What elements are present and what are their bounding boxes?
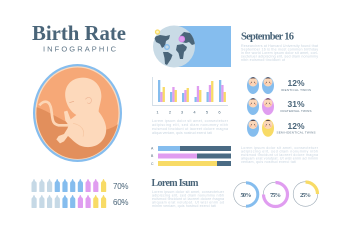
text block: bars caption — [241, 146, 319, 164]
axis labels: 5 — [206, 110, 209, 114]
pin: yellow — [156, 30, 160, 34]
heading: September 16: September 16 — [241, 32, 294, 42]
text block: september: in the world Lorem ipsum dolor sit amet, con- — [241, 51, 319, 55]
twins: semi-identical: SEMI-IDENTICAL TWINS — [276, 130, 316, 134]
bars — [158, 80, 226, 102]
map panel with globe — [153, 26, 231, 68]
twins: semi-identical — [247, 119, 316, 137]
text block: lorem: adipiscing elit, sed diam nonummy nibh — [152, 194, 224, 198]
stacked bars: C — [151, 162, 154, 166]
stacked bars: A — [151, 146, 154, 150]
subtitle: INFOGRAPHIC — [43, 44, 117, 54]
donut: 75%: 75% — [270, 192, 281, 199]
text block: lorem: minim veniam, quis nostrud exerci tati — [152, 204, 216, 208]
axis labels: 1 — [156, 110, 159, 114]
donut: 50% — [234, 182, 258, 207]
axis labels: 6 — [218, 110, 221, 114]
pictogram: bottles 60% — [32, 195, 128, 208]
donut: 75% — [263, 182, 288, 207]
text block: chart caption: adipiscing elit, sed diam nonummy nibh — [152, 123, 228, 127]
pin: purple — [179, 36, 185, 42]
pin: blue — [165, 45, 169, 49]
text block: bars caption: veniam, quis nostrud exerci tati — [241, 160, 296, 164]
stacked bars — [151, 146, 231, 166]
text block: bars caption: adipiscing elit, sed diam nonummy nibh — [241, 150, 318, 154]
text block: chart caption: euismod tincidunt ut laoreet dolore magna — [152, 127, 228, 131]
text block: chart caption: Lorem ipsum dolor sit amet, consectetuer — [152, 119, 229, 123]
twins: identical: 12% — [287, 78, 305, 88]
pictogram: bottles 70%: 70% — [113, 182, 128, 191]
text block: chart caption — [152, 119, 229, 135]
text block: lorem: aliquam erat volutpat. Ut wisi enim ad — [152, 200, 224, 204]
text block: september: nibh euismod tincidunt ut — [241, 58, 285, 62]
axis labels: 2 — [169, 110, 172, 114]
heading: Lorem Isum: Lorem Isum — [152, 178, 199, 189]
text block: bars caption: Lorem ipsum dolor sit amet, consectetuer — [241, 146, 319, 150]
axis labels: 3 — [181, 110, 184, 114]
twins: identical: IDENTICAL TWINS — [281, 88, 311, 92]
text block: september: September 16 is the most common birthday — [241, 48, 318, 52]
text block: bars caption: euismod tincidunt ut laoreet dolore magna — [241, 153, 318, 157]
twins: fraternal: 31% — [287, 99, 305, 109]
twins: fraternal: FRATERNAL TWINS — [280, 109, 312, 113]
axis labels — [156, 110, 221, 114]
pictogram: bottles 70% — [32, 179, 128, 192]
text block: lorem: euismod tincidunt ut laoreet dolore magna — [152, 197, 224, 201]
illustration: fetus in womb — [33, 64, 122, 163]
pictogram: bottles 60%: 60% — [113, 198, 128, 207]
twins: fraternal — [247, 98, 312, 115]
donut: 50%: 50% — [240, 192, 252, 199]
text block: september: Researchers at Harvard University found that — [241, 44, 318, 48]
text block: september: sectetuer adipiscing elit, sed diam nonummy — [241, 54, 318, 58]
donut: 25%: 25% — [300, 192, 311, 199]
bar chart — [152, 77, 228, 114]
text block: bars caption: aliquam erat volutpat. Ut wisi enim ad minim — [241, 156, 318, 160]
twins: semi-identical: 12% — [287, 121, 305, 131]
donut: 25% — [293, 182, 318, 206]
stacked bars: B — [151, 154, 154, 158]
text block: chart caption: aliqua veniam, quis nostrud exerci tati — [152, 131, 212, 135]
text block: lorem: Lorem ipsum dolor sit amet, consectetuer — [152, 190, 225, 194]
twins: identical — [247, 77, 311, 94]
axis labels: 4 — [193, 110, 196, 114]
text block: lorem — [152, 190, 225, 208]
text block: september — [241, 44, 319, 62]
title: Birth Rate — [32, 21, 126, 45]
